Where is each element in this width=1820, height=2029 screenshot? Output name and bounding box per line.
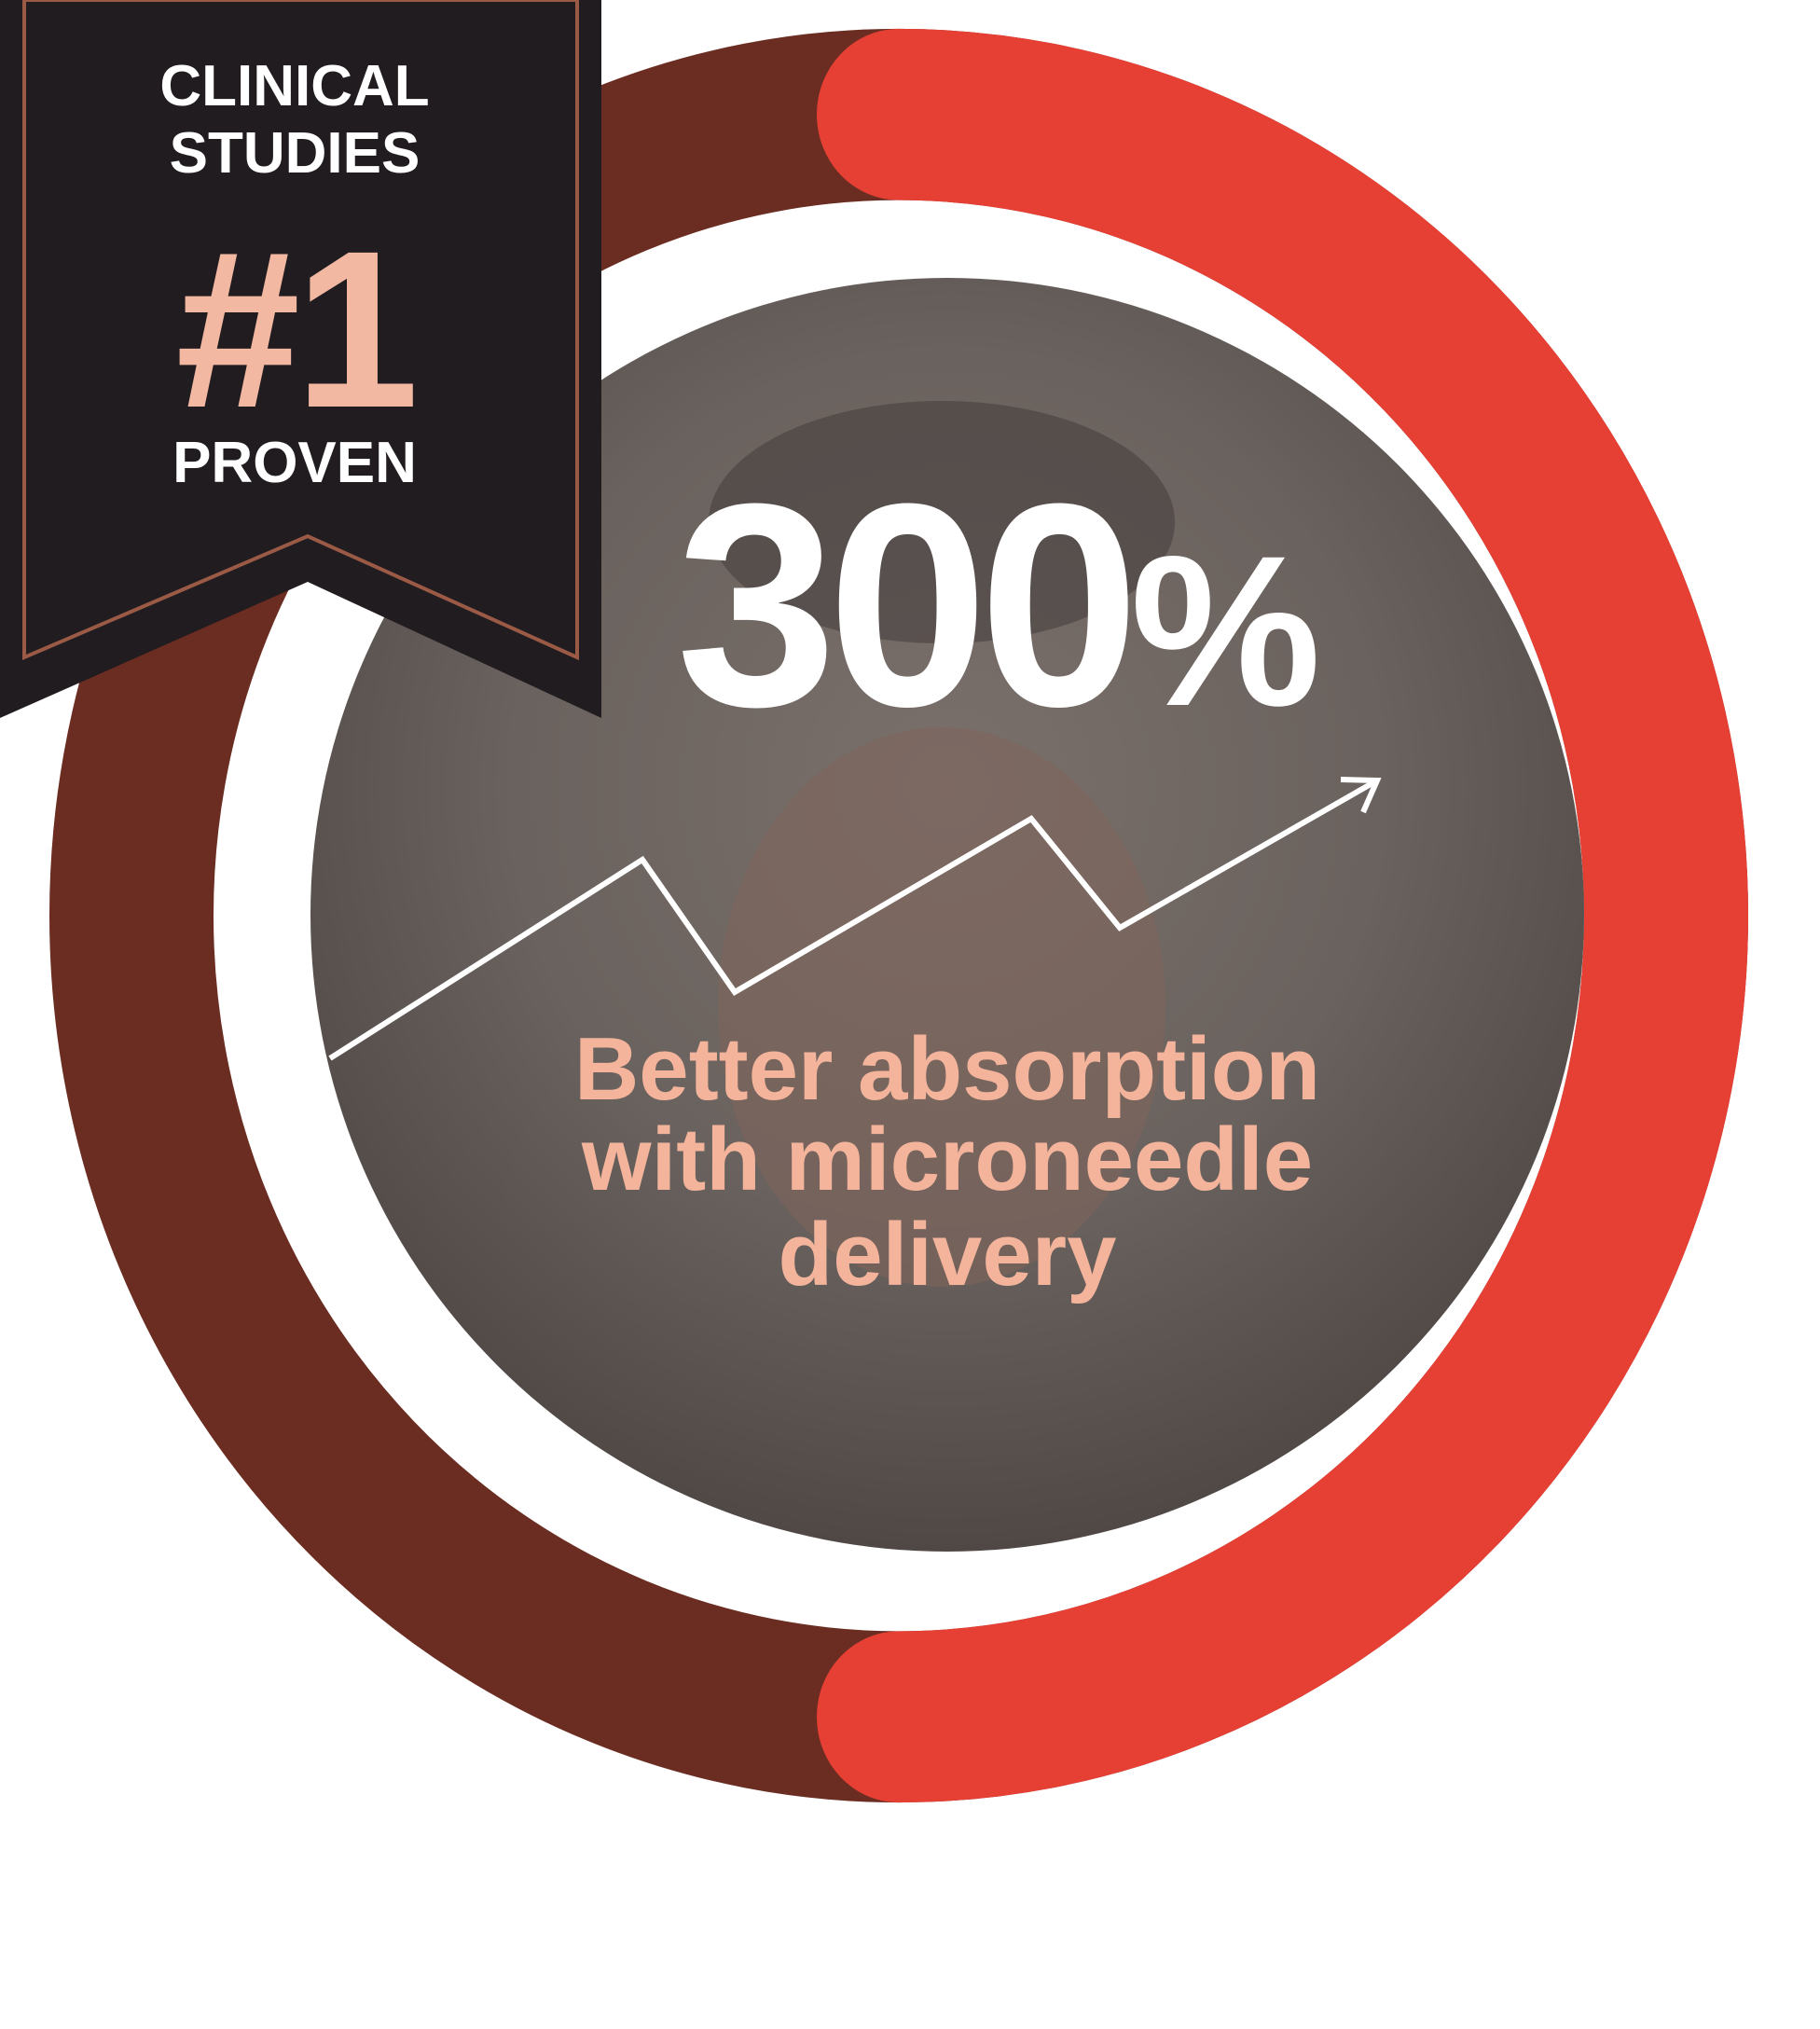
badge text [159,54,430,495]
badge [0,0,601,718]
ring: brown base [131,115,1666,1717]
stat: 300%: 300% [676,443,1316,766]
badge text: STUDIES [170,121,420,186]
badge text: #1 [176,204,413,454]
caption: delivery [779,1205,1116,1304]
ring: red arc [899,115,1666,1717]
caption [574,1019,1320,1304]
photo circle [310,278,1584,1552]
caption: with microneedle [581,1110,1313,1209]
badge text: CLINICAL [159,54,430,118]
badge text: PROVEN [172,431,417,495]
arrow: growth line [330,780,1377,1058]
ring [131,115,1666,1717]
caption: Better absorption [574,1019,1320,1119]
